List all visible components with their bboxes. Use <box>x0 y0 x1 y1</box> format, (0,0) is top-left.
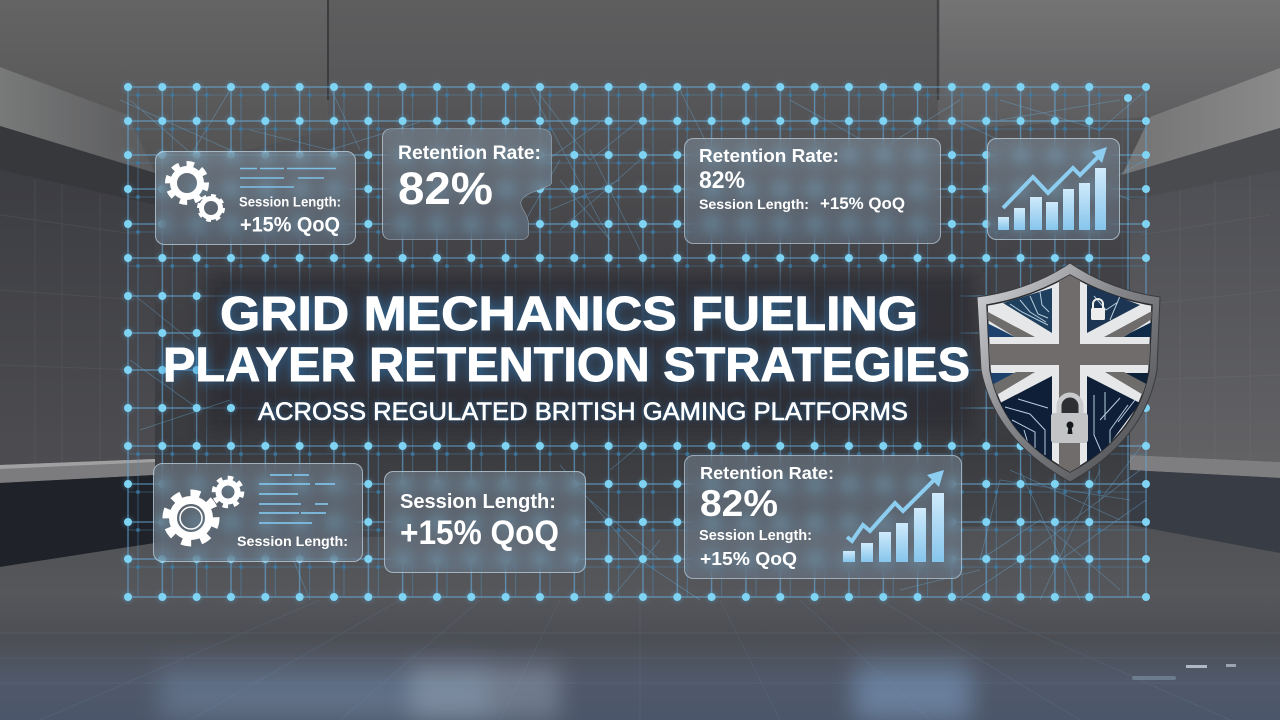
bar chart <box>843 493 944 562</box>
icon: gears <box>168 164 224 220</box>
title block <box>158 263 1160 482</box>
icon: large lock <box>1051 395 1088 443</box>
panel: session length with gears, lower <box>153 463 363 562</box>
label: session length: Session Length: <box>400 491 556 513</box>
icon: UK shield with lock <box>977 263 1160 482</box>
value: 82%: 82% <box>699 167 745 194</box>
label: session length: Session Length: <box>699 528 812 544</box>
panel: retention and session summary <box>684 138 941 244</box>
value: +15% QoQ: +15% QoQ <box>700 549 797 569</box>
panel: session length +15% <box>384 471 586 573</box>
icon: small lock <box>1091 299 1105 320</box>
icon: gears <box>166 478 242 543</box>
heading line 1: GRID MECHANICS FUELING <box>220 288 918 341</box>
decorative data lines <box>259 475 335 523</box>
arrow: trend up <box>1003 147 1107 208</box>
label: session length: Session Length: <box>699 196 809 212</box>
bar chart <box>998 168 1106 230</box>
panel: growth chart <box>987 138 1120 240</box>
label: retention rate: Retention Rate: <box>398 142 541 164</box>
label: retention rate: Retention Rate: <box>700 463 834 483</box>
label: retention rate: Retention Rate: <box>699 146 839 166</box>
value: +15% QoQ: +15% QoQ <box>820 194 905 213</box>
heading line 2: PLAYER RETENTION STRATEGIES <box>163 339 970 392</box>
panel: retention rate 82% <box>382 128 552 241</box>
value: +15% QoQ: +15% QoQ <box>400 514 559 552</box>
label: session length: Session Length: <box>237 533 348 549</box>
panel: retention, session, chart <box>684 455 962 579</box>
decorative data lines <box>240 168 336 187</box>
value: +15% QoQ: +15% QoQ <box>240 214 340 236</box>
value: 82%: 82% <box>700 483 778 524</box>
panel: session length with gears <box>155 151 356 245</box>
subheading: ACROSS REGULATED BRITISH GAMING PLATFORMS <box>258 398 908 426</box>
arrow: trend up <box>847 470 944 541</box>
value: 82%: 82% <box>398 163 493 214</box>
label: session length: Session Length: <box>239 194 341 210</box>
